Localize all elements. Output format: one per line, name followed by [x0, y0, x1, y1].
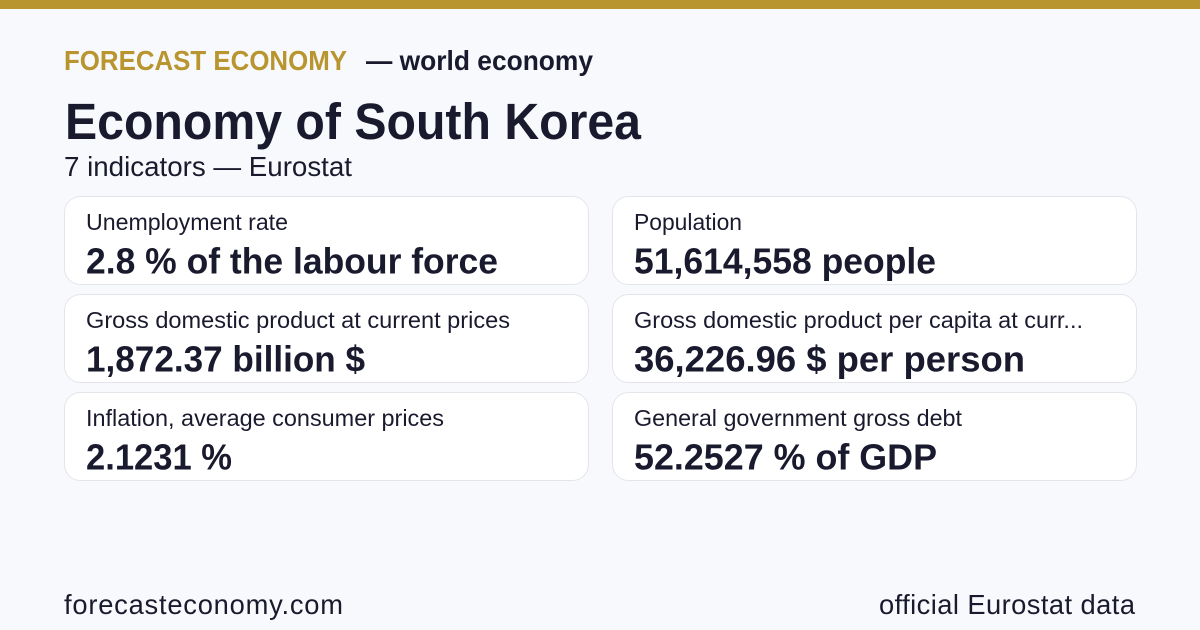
- panel: inflation: 2.1231 %: [86, 438, 232, 478]
- panel: inflation: Inflation, average consumer prices: [86, 405, 444, 431]
- panel: government debt: General government gross debt: [634, 405, 963, 431]
- brand line: [64, 45, 594, 76]
- panel: unemployment rate: [64, 196, 588, 284]
- panel: unemployment rate: Unemployment rate: [86, 209, 288, 235]
- brand line: — world economy: [366, 45, 594, 76]
- footer: website: forecasteconomy.com: [64, 589, 343, 620]
- panel: gdp per capita: [612, 294, 1136, 382]
- top accent bar: [0, 0, 1200, 9]
- footer: data source: official Eurostat data: [879, 589, 1136, 620]
- panel: unemployment rate: 2.8 % of the labour force: [86, 242, 498, 282]
- panel: population: 51,614,558 people: [634, 242, 936, 282]
- subtitle: 7 indicators — Eurostat: [64, 151, 352, 182]
- panel: gdp per capita: 36,226.96 $ per person: [634, 340, 1025, 380]
- title: Economy of South Korea: [65, 93, 642, 150]
- panel: population: Population: [634, 209, 742, 235]
- panel: population: [612, 196, 1136, 284]
- panel: government debt: [612, 392, 1136, 480]
- panel: gross domestic product: Gross domestic product at current prices: [86, 307, 510, 333]
- panel: inflation: [64, 392, 588, 480]
- brand line: FORECAST ECONOMY: [64, 45, 347, 76]
- panel: gross domestic product: [64, 294, 588, 382]
- panel: government debt: 52.2527 % of GDP: [634, 438, 937, 478]
- panel: gross domestic product: 1,872.37 billion $: [86, 340, 365, 380]
- panel: gdp per capita: Gross domestic product per capita at curr...: [634, 307, 1083, 333]
